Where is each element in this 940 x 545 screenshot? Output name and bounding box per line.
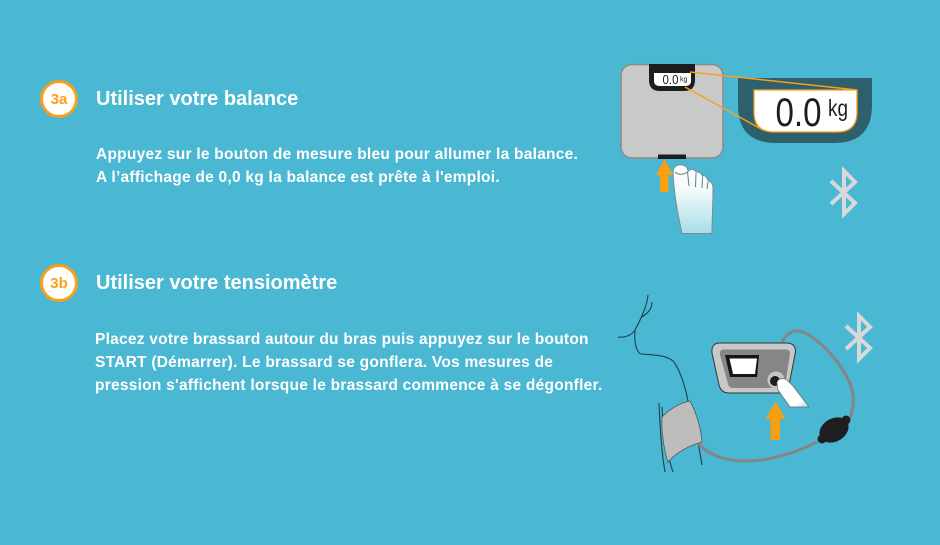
arrow: press scale button xyxy=(656,159,673,192)
monitor xyxy=(712,343,796,393)
enlarged unit: kg xyxy=(828,95,848,121)
toe lines xyxy=(675,172,708,189)
icon: bluetooth tensiometer xyxy=(846,316,870,359)
icon: foot xyxy=(673,165,713,234)
badge 3b: 3b xyxy=(50,275,68,292)
badge 3b xyxy=(40,264,78,302)
badge 3a: 3a xyxy=(51,91,67,108)
scale button xyxy=(658,154,686,159)
icon: bluetooth scale xyxy=(831,171,855,214)
text: tensiometre instructions: START (Démarrer). Le brassard se gonflera. Vos mesures de xyxy=(95,354,553,371)
bulb pump xyxy=(815,412,853,448)
scale display reading: 0.0 xyxy=(662,73,679,87)
illustration: scale xyxy=(621,64,723,159)
text: tensiometre instructions xyxy=(95,331,602,394)
scale display xyxy=(654,73,691,86)
arrow: press start xyxy=(766,402,786,440)
enlarged reading: 0.0 xyxy=(776,91,822,135)
illustration: neck and arm outline xyxy=(618,295,702,472)
panel: enlarged display xyxy=(738,78,872,143)
badge 3a xyxy=(40,80,78,118)
text: tensiometre instructions: pression s'affichent lorsque le brassard commence à se dégonfler. xyxy=(95,377,602,394)
monitor screen display xyxy=(730,358,757,374)
start button xyxy=(768,372,784,388)
text: tensiometre instructions: Placez votre brassard autour du bras puis appuyez sur le bouton xyxy=(95,331,589,348)
callout lines xyxy=(685,72,857,130)
heading: balance: Utiliser votre balance xyxy=(96,88,298,110)
text: balance instructions: A l’affichage de 0,0 kg la balance est prête à l'emploi. xyxy=(96,169,500,186)
heading: tensiometre: Utiliser votre tensiomètre xyxy=(96,272,337,294)
text: balance instructions xyxy=(96,146,578,186)
monitor panel xyxy=(720,350,790,388)
scale display unit: kg xyxy=(680,74,688,84)
icon: finger xyxy=(777,379,809,407)
cuff xyxy=(662,401,702,462)
scale display housing xyxy=(649,64,695,91)
enlarged display screen xyxy=(754,90,857,132)
tube xyxy=(698,331,853,461)
text: balance instructions: Appuyez sur le bouton de mesure bleu pour allumer la balance. xyxy=(96,146,578,163)
monitor screen xyxy=(725,355,759,377)
